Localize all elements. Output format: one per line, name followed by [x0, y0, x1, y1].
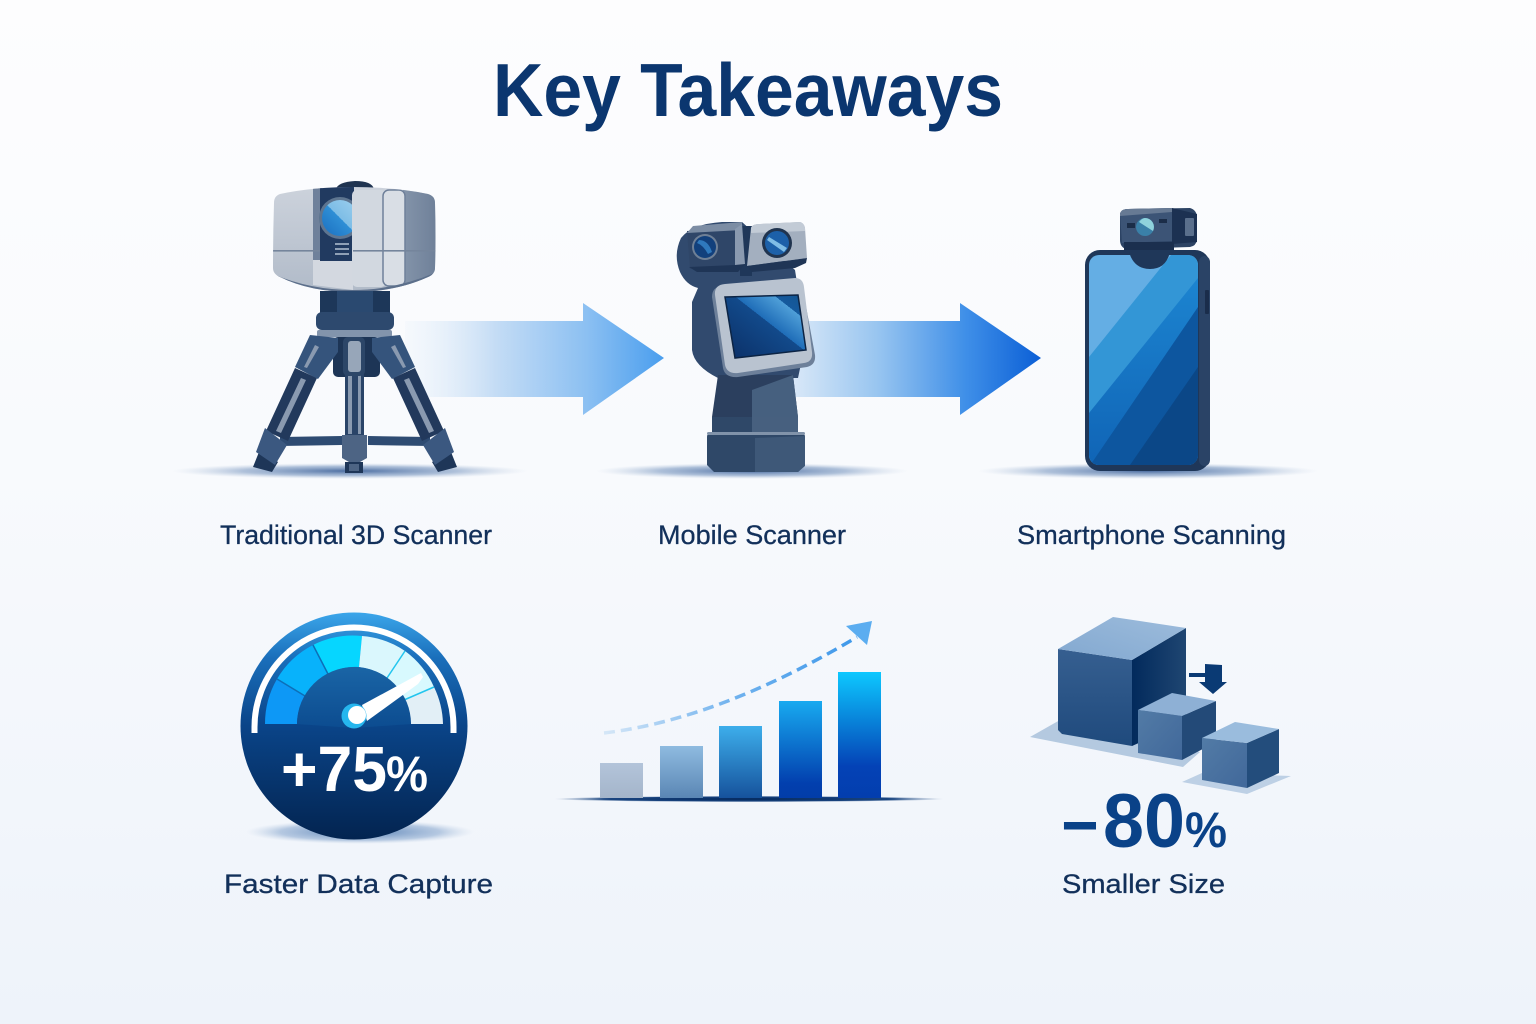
bar 1 [600, 763, 643, 798]
right lens [762, 228, 792, 258]
gauge disc [240, 612, 468, 840]
left lens housing [687, 228, 735, 269]
icon: speed gauge +75% [240, 612, 468, 840]
neck [712, 375, 798, 417]
floor shadow small [1182, 773, 1291, 794]
small cube [1202, 722, 1279, 788]
centre leg [345, 370, 364, 436]
bridge [740, 226, 752, 276]
medium cube [1138, 693, 1216, 760]
bar 4 [779, 701, 822, 798]
title: Key Takeaways [493, 48, 1003, 132]
left lens [692, 234, 718, 260]
value text: +75 [281, 733, 387, 805]
label: faster data capture: Faster Data Capture [224, 869, 493, 899]
left leg [253, 335, 338, 472]
label: mobile scanner: Mobile Scanner [658, 520, 846, 550]
trend arrow head [846, 621, 872, 645]
notch [1129, 252, 1170, 269]
lower base [707, 433, 805, 472]
tick lines [277, 645, 328, 696]
gauge dome [297, 667, 411, 728]
white rim arc [254, 628, 454, 733]
icon: shrinking cubes [1030, 617, 1291, 794]
arrow: mobile to smartphone [790, 303, 1041, 415]
gauge segments [265, 679, 305, 724]
bar 5 [838, 672, 881, 798]
value: -80%: 80 [1103, 779, 1185, 864]
ground shadow: scanner [172, 463, 528, 479]
label: smaller size: Smaller Size [1062, 869, 1225, 899]
bar 2 [660, 746, 703, 798]
camera attachment [1120, 208, 1197, 249]
screen [725, 295, 806, 358]
floor shadow large [1030, 720, 1200, 767]
icon: mobile scanner [677, 222, 815, 472]
bar 3 [719, 726, 762, 798]
attachment lens [1136, 218, 1154, 236]
bar chart [554, 621, 944, 802]
gauge shadow [246, 820, 474, 844]
trend arrow dashes [604, 637, 857, 733]
phone body [1085, 250, 1210, 471]
crossbar [280, 436, 342, 446]
needle [362, 673, 423, 721]
ground shadow: mobile [596, 463, 908, 479]
scanner top cap [336, 181, 374, 189]
screen frame [712, 280, 815, 377]
scanner head [273, 187, 436, 291]
needle hub [342, 704, 366, 728]
baseline [554, 796, 944, 802]
icon: traditional 3D scanner on tripod [253, 180, 457, 473]
large cube [1058, 617, 1186, 746]
phone screen [1089, 255, 1198, 480]
right leg [372, 335, 457, 472]
neck and collar [320, 291, 390, 313]
right lens housing [747, 222, 807, 266]
back body [677, 222, 806, 378]
ground shadow: smartphone [978, 463, 1318, 479]
value: -80% [1062, 778, 1227, 864]
value: -80%: % [1185, 802, 1227, 858]
shrink arrow [1189, 664, 1227, 694]
label: smartphone scanning: Smartphone Scanning [1017, 520, 1286, 550]
arrow: scanner to mobile [405, 303, 664, 415]
label: traditional 3D scanner: Traditional 3D Scanner [220, 520, 492, 550]
value: -80%: – [1062, 778, 1098, 863]
icon: smartphone with scanner attachment [1085, 208, 1210, 480]
icon: speed gauge +75%: % [386, 746, 428, 802]
upper base [712, 417, 798, 434]
